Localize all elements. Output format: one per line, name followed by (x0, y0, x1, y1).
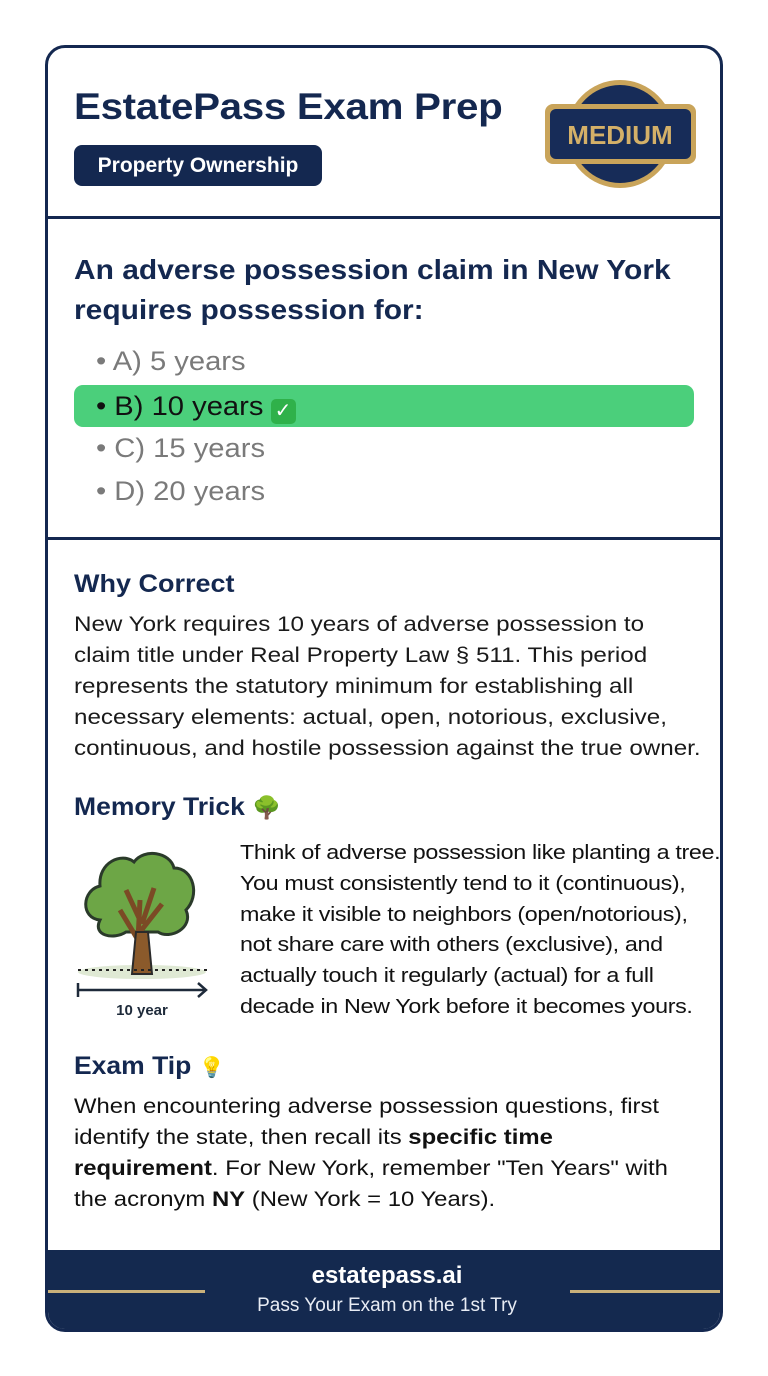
option C: • C) 15 years (96, 433, 265, 463)
memory trick text (240, 842, 720, 1018)
memory trick text: make it visible to neighbors (open/notorious), (240, 904, 688, 926)
divider (48, 216, 726, 219)
why correct text: claim title under Real Property Law § 511. This period (74, 643, 647, 667)
option B correct (74, 385, 694, 427)
difficulty badge (545, 80, 696, 188)
memory trick text: decade in New York before it becomes yours. (240, 996, 693, 1018)
why correct text: represents the statutory minimum for establishing all (74, 674, 633, 698)
question: requires possession for: (74, 294, 424, 325)
difficulty badge: MEDIUM (567, 120, 673, 150)
question (74, 254, 671, 325)
category pill: Property Ownership (98, 154, 298, 177)
memory trick text: not share care with others (exclusive), and (240, 934, 663, 956)
option B correct: • B) 10 years (96, 391, 263, 421)
heading: why correct: Why Correct (74, 570, 235, 598)
memory trick text: You must consistently tend to it (continuous), (240, 873, 685, 895)
footer tagline: Pass Your Exam on the 1st Try (257, 1295, 517, 1316)
title: EstatePass Exam Prep (74, 86, 502, 127)
why correct text: necessary elements: actual, open, notorious, exclusive, (74, 705, 667, 729)
exam tip text (74, 1094, 668, 1211)
exam tip text: the acronym NY (New York = 10 Years). (74, 1187, 495, 1211)
category pill (74, 145, 322, 186)
exam tip text: identify the state, then recall its specific time (74, 1125, 553, 1149)
why correct text (74, 612, 701, 760)
heading: memory trick: Memory Trick 🌳 (74, 793, 281, 821)
option D: • D) 20 years (96, 476, 265, 506)
question: An adverse possession claim in New York (74, 254, 671, 285)
divider (48, 537, 726, 540)
gold line left (48, 1290, 205, 1293)
gold line right (570, 1290, 726, 1293)
memory trick text: actually touch it regularly (actual) for a full (240, 965, 654, 987)
option A: • A) 5 years (96, 346, 246, 376)
why correct text: New York requires 10 years of adverse possession to (74, 612, 644, 636)
icon: tree with 10 year timeline (76, 852, 208, 1019)
footer (48, 1250, 726, 1335)
options (74, 346, 694, 506)
footer brand: estatepass.ai (312, 1262, 462, 1289)
heading: exam tip: Exam Tip 💡 (74, 1052, 225, 1080)
memory trick text: Think of adverse possession like planting a tree. (240, 842, 720, 864)
icon: tree with 10 year timeline: 10 year (116, 1002, 168, 1019)
option B correct: ✓ (275, 400, 291, 422)
exam tip text: When encountering adverse possession questions, first (74, 1094, 659, 1118)
why correct text: continuous, and hostile possession against the true owner. (74, 736, 701, 760)
exam tip text: requirement. For New York, remember "Ten Years" with (74, 1156, 668, 1180)
